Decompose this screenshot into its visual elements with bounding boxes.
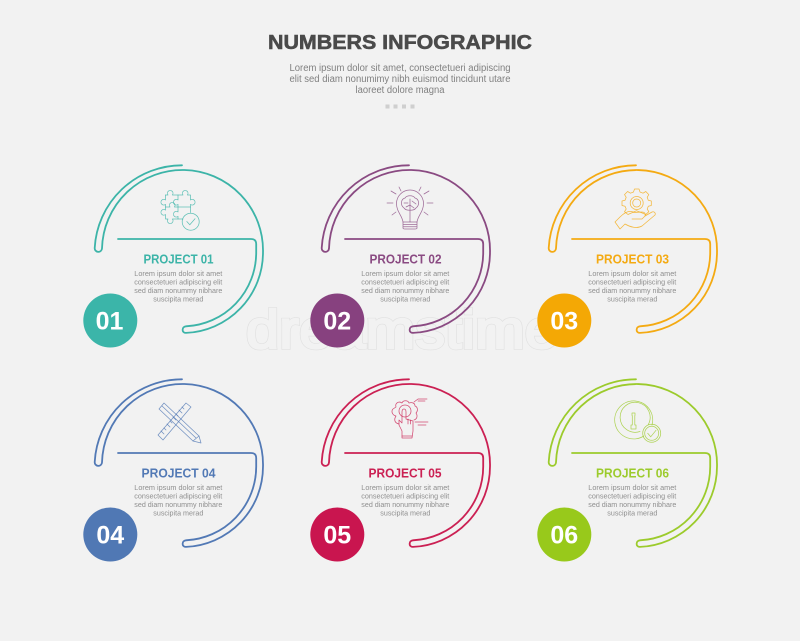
number badge 03: 03 <box>550 308 578 336</box>
project label 05: PROJECT 05 <box>368 466 442 480</box>
icon: hand touching gear <box>392 399 428 438</box>
description 01 <box>134 269 223 304</box>
description 02: Lorem ipsum dolor sit amet <box>361 269 450 278</box>
icon: ruler and pencil <box>158 403 201 443</box>
description 02 <box>361 269 450 304</box>
description 03 <box>588 269 677 304</box>
circular frame 02 <box>322 165 490 333</box>
circular frame 05 <box>322 379 490 547</box>
description 05 <box>361 483 450 518</box>
description 03: sed diam nonummy nibhare <box>588 286 676 295</box>
description 03: consectetueri adipiscing elit <box>588 278 677 286</box>
subtitle text: elit sed diam nonumimy nibh euismod tincidunt utare <box>290 74 511 85</box>
project label 01: PROJECT 01 <box>144 252 214 266</box>
number badge 05: 05 <box>323 522 351 550</box>
description 01: suscipita merad <box>153 294 203 304</box>
description 03: suscipita merad <box>607 294 657 304</box>
description 06: sed diam nonummy nibhare <box>588 500 676 509</box>
number badge 06: 06 <box>550 522 578 550</box>
divider dots <box>386 104 414 108</box>
project label 04: PROJECT 04 <box>142 466 216 480</box>
description 01: Lorem ipsum dolor sit amet <box>134 269 223 278</box>
number badge 04: 04 <box>96 522 124 550</box>
description 06: suscipita merad <box>607 508 657 518</box>
description 04: sed diam nonummy nibhare <box>134 500 222 509</box>
number badge 02 <box>310 294 364 348</box>
description 03: Lorem ipsum dolor sit amet <box>588 269 677 278</box>
circular frame 03 <box>549 165 717 333</box>
number badge 02: 02 <box>323 308 351 336</box>
number badge 03 <box>537 294 591 348</box>
subtitle text: laoreet dolore magna <box>356 85 445 96</box>
description 06: Lorem ipsum dolor sit amet <box>588 483 677 492</box>
description 01: sed diam nonummy nibhare <box>134 286 222 295</box>
panel: project 01 <box>83 165 263 348</box>
number badge 06 <box>537 508 591 562</box>
icon: puzzle with check <box>161 190 199 230</box>
panel: project 03 <box>537 165 717 348</box>
number badge 01 <box>83 294 137 348</box>
description 05: consectetueri adipiscing elit <box>361 492 450 500</box>
project label 06: PROJECT 06 <box>596 466 669 480</box>
panel: project 02 <box>310 165 490 348</box>
watermark: dreamstime <box>246 300 558 360</box>
description 05: sed diam nonummy nibhare <box>361 500 449 509</box>
description 06: consectetueri adipiscing elit <box>588 492 677 500</box>
description 01: consectetueri adipiscing elit <box>134 278 223 286</box>
title: NUMBERS INFOGRAPHIC <box>268 32 532 54</box>
subtitle text <box>290 63 511 96</box>
description 04 <box>134 483 223 518</box>
number badge 01: 01 <box>96 308 123 336</box>
icon: info circle with check <box>615 401 661 442</box>
icon: light bulb with brain <box>387 187 433 229</box>
circular frame 06 <box>549 379 717 547</box>
panel: project 04 <box>83 379 263 562</box>
circular frame 01 <box>95 165 263 333</box>
description 05: Lorem ipsum dolor sit amet <box>361 483 450 492</box>
description 02: consectetueri adipiscing elit <box>361 278 450 286</box>
panel: project 06 <box>537 379 717 562</box>
subtitle text: Lorem ipsum dolor sit amet, consectetueri adipiscing <box>290 63 510 74</box>
watermark: dreamstime <box>246 300 558 360</box>
description 06 <box>588 483 677 518</box>
panel: project 05 <box>310 379 490 562</box>
description 05: suscipita merad <box>380 508 430 518</box>
number badge 05 <box>310 508 364 562</box>
description 04: consectetueri adipiscing elit <box>134 492 223 500</box>
number badge 04 <box>83 508 137 562</box>
icon: hand holding gear <box>615 189 655 229</box>
project label 02: PROJECT 02 <box>370 252 442 266</box>
description 04: suscipita merad <box>153 508 203 518</box>
project label 03: PROJECT 03 <box>596 252 669 266</box>
description 04: Lorem ipsum dolor sit amet <box>134 483 223 492</box>
circular frame 04 <box>95 379 263 547</box>
description 02: suscipita merad <box>380 294 430 304</box>
description 02: sed diam nonummy nibhare <box>361 286 449 295</box>
